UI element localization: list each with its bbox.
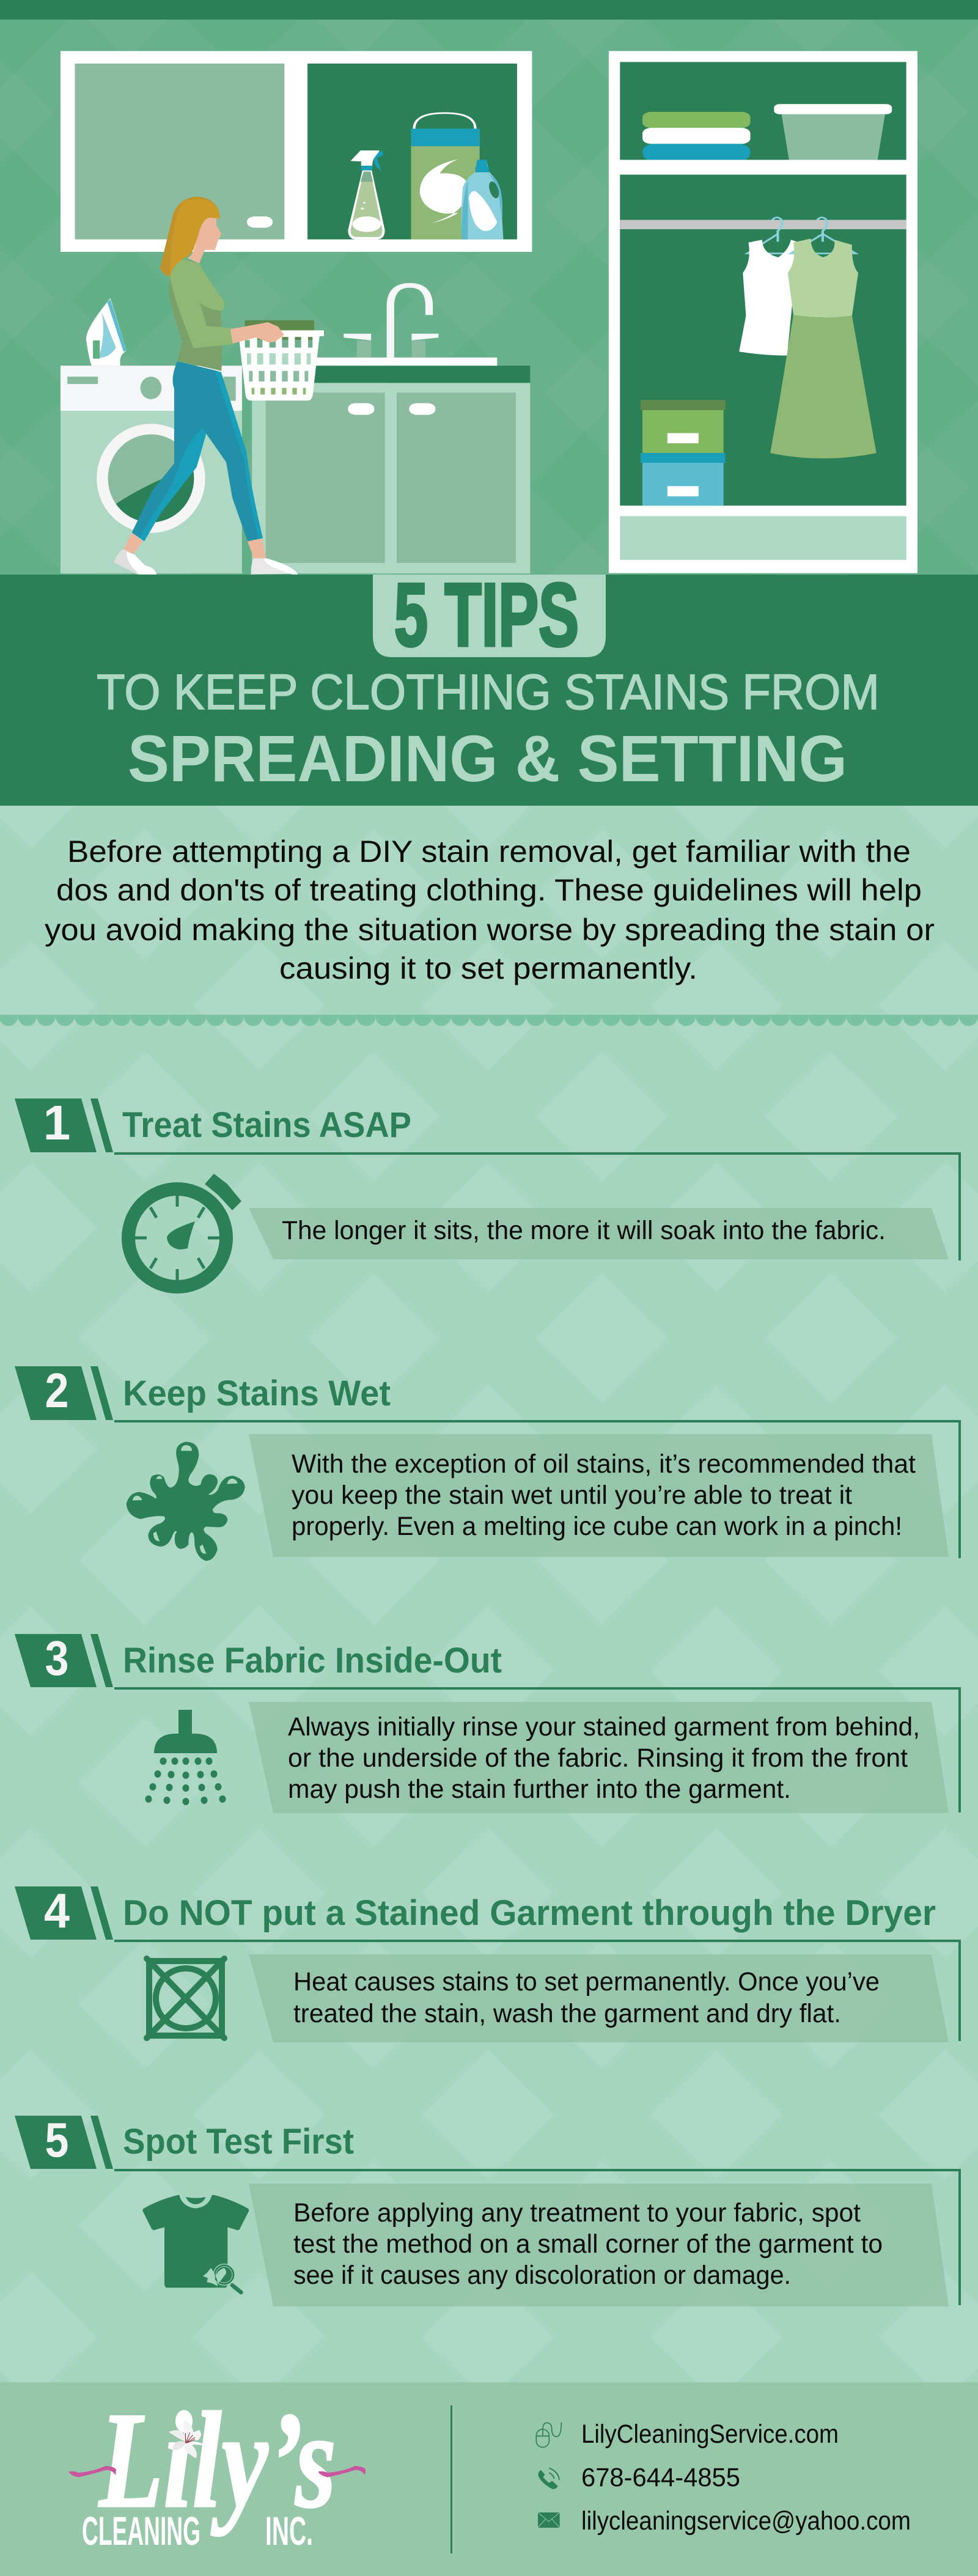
icon: splash stain xyxy=(127,1442,245,1561)
contact: phone: 678-644-4855 xyxy=(581,2463,740,2492)
ankles xyxy=(123,532,266,559)
text panel 5: test the method on a small corner of the garment to xyxy=(293,2229,883,2259)
storage tub xyxy=(774,104,892,160)
text panel 3: or the underside of the fabric. Rinsing it from the front xyxy=(288,1743,908,1773)
tip 3 xyxy=(15,1631,960,1813)
hair back xyxy=(160,197,220,277)
icon: stopwatch xyxy=(128,1174,241,1287)
upper cabinet xyxy=(61,51,532,252)
bracket line 5 xyxy=(114,2170,960,2305)
number tab 5 xyxy=(15,2113,113,2169)
number tab 5: 5 xyxy=(45,2113,68,2167)
intro paragraph: Before attempting a DIY stain removal, get familiar with the xyxy=(67,834,911,869)
number tab 4 xyxy=(15,1883,113,1940)
text panel 4: treated the stain, wash the garment and dry flat. xyxy=(293,1999,841,2028)
face and neck xyxy=(188,218,221,263)
number tab 3: 3 xyxy=(45,1631,68,1685)
laundry basket xyxy=(238,320,324,400)
text panel 2: properly. Even a melting ice cube can work in a pinch! xyxy=(292,1512,902,1541)
heading 1: Treat Stains ASAP xyxy=(122,1105,411,1145)
jeans highlight xyxy=(139,370,263,541)
number tab 1 xyxy=(15,1095,113,1152)
faucet xyxy=(344,285,438,358)
heading 2: Keep Stains Wet xyxy=(123,1374,391,1413)
text panel 2: you keep the stain wet until you’re able to treat it xyxy=(292,1481,852,1510)
bracket line 4 xyxy=(114,1941,960,2041)
shoes xyxy=(114,549,298,575)
laundry room scene xyxy=(61,51,917,573)
text panel 3: may push the stain further into the garment. xyxy=(288,1775,791,1804)
text panel 5: Before applying any treatment to your fabric, spot xyxy=(293,2198,861,2228)
text panel 3: Always initially rinse your stained garment from behind, xyxy=(288,1712,920,1742)
title badge: 5 TIPS xyxy=(394,565,579,664)
icon: t-shirt with magnifier xyxy=(142,2195,249,2292)
intro paragraph xyxy=(45,834,935,985)
washing machine xyxy=(61,366,242,573)
detergent bottle xyxy=(461,160,503,240)
contact: website: LilyCleaningService.com xyxy=(581,2420,839,2449)
storage boxes xyxy=(641,400,726,506)
tip 1 xyxy=(15,1095,960,1287)
jeans xyxy=(132,361,263,541)
hanging tank top xyxy=(739,218,801,356)
hair front xyxy=(170,199,220,277)
footer divider xyxy=(450,2405,452,2553)
bracket line 2 xyxy=(114,1421,960,1558)
tip 4 xyxy=(15,1883,960,2042)
icon: shower head xyxy=(145,1710,226,1805)
footer xyxy=(0,2382,978,2576)
folded towels xyxy=(642,112,751,160)
sweater xyxy=(170,259,233,348)
hanging dress xyxy=(770,218,877,458)
woman carrying laundry basket xyxy=(114,197,324,575)
closet xyxy=(609,51,917,573)
text panel 5 xyxy=(249,2184,949,2306)
text panel 3 xyxy=(249,1702,949,1813)
arm xyxy=(230,322,284,344)
icon: envelope xyxy=(538,2512,560,2528)
heading 4: Do NOT put a Stained Garment through the Dryer xyxy=(123,1893,936,1933)
sweater shadow xyxy=(169,277,222,371)
intro paragraph: dos and don'ts of treating clothing. These guidelines will help xyxy=(56,873,922,907)
intro paragraph: you avoid making the situation worse by spreading the stain or xyxy=(45,913,935,947)
bracket line 1 xyxy=(114,1154,960,1260)
number tab 3 xyxy=(15,1631,113,1687)
text panel 2: With the exception of oil stains, it’s recommended that xyxy=(292,1449,916,1479)
icon: do not tumble dry xyxy=(147,1959,224,2038)
heading 5: Spot Test First xyxy=(123,2122,354,2162)
header illustration: laundry room xyxy=(0,0,978,575)
number tab 1: 1 xyxy=(43,1095,70,1150)
tip 2 xyxy=(15,1363,960,1561)
main title: SPREADING & SETTING xyxy=(128,721,847,795)
company logo: Lily’s xyxy=(98,2383,336,2536)
text panel 4 xyxy=(249,1954,949,2042)
text panel 2 xyxy=(249,1434,949,1557)
contact: email: lilycleaningservice@yahoo.com xyxy=(581,2506,911,2536)
text panel 1 xyxy=(249,1208,949,1259)
logo swooshes and lily flower xyxy=(68,2420,366,2477)
number tab 2: 2 xyxy=(45,1363,68,1418)
text panel 4: Heat causes stains to set permanently. Once you’ve xyxy=(293,1967,880,1996)
spray bottle xyxy=(348,150,385,240)
heading 3: Rinse Fabric Inside-Out xyxy=(123,1641,502,1680)
company logo: CLEANING xyxy=(82,2508,200,2553)
icon: computer mouse xyxy=(536,2423,561,2447)
number tab 4: 4 xyxy=(44,1883,70,1938)
title band xyxy=(0,565,978,806)
text panel 1: The longer it sits, the more it will soak into the fabric. xyxy=(282,1216,886,1245)
text panel 5: see if it causes any discoloration or damage. xyxy=(293,2261,791,2290)
detergent tub xyxy=(411,113,480,240)
iron xyxy=(86,298,127,366)
top band xyxy=(0,0,978,20)
intro paragraph: causing it to set permanently. xyxy=(279,951,697,985)
number tab 2 xyxy=(15,1363,113,1420)
icon: phone xyxy=(539,2468,559,2489)
bracket line 3 xyxy=(114,1688,960,1812)
sink cabinet xyxy=(252,358,530,573)
subtitle: TO KEEP CLOTHING STAINS FROM xyxy=(97,664,880,720)
tip 5 xyxy=(15,2113,960,2306)
company logo: INC. xyxy=(265,2508,313,2553)
